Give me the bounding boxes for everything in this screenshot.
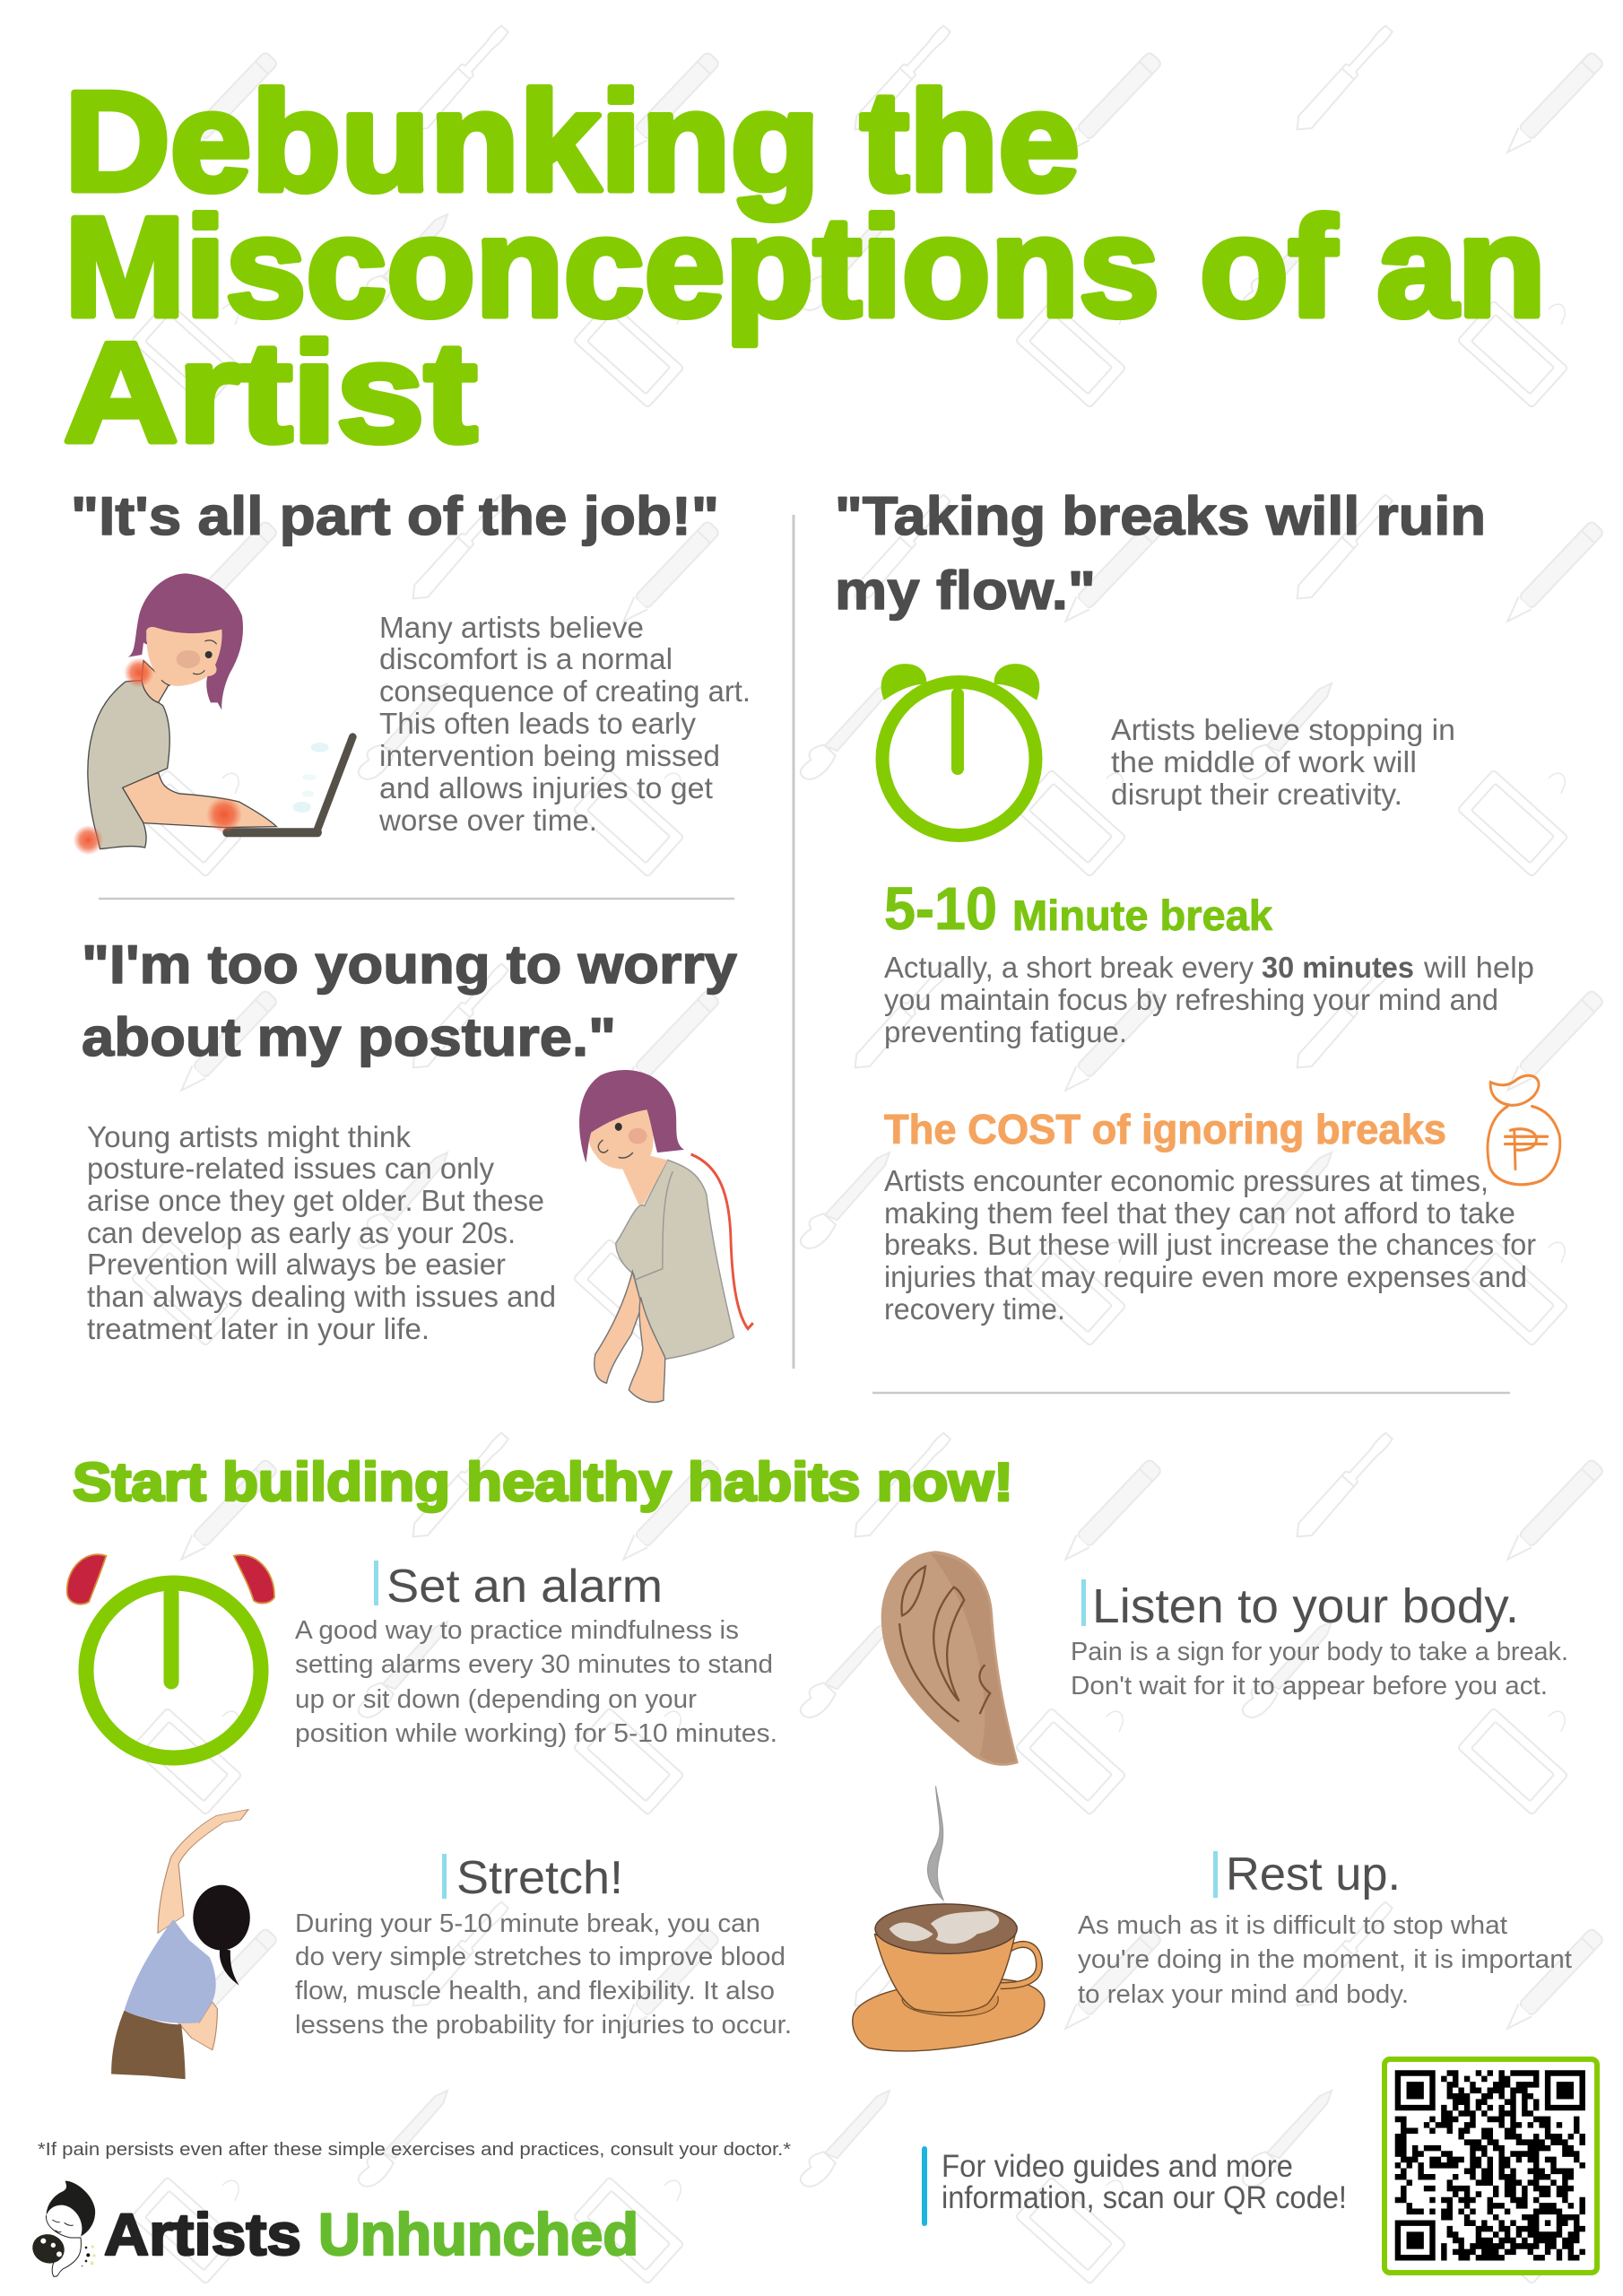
text block: you maintain focus by refreshing your mind and <box>884 983 1498 1016</box>
heading: taking breaks <box>835 486 1486 621</box>
text block: A good way to practice mindfulness is <box>295 1616 739 1645</box>
text block: up or sit down (depending on your <box>295 1685 697 1714</box>
text block: consequence of creating art. <box>379 674 751 708</box>
text block: Don't wait for it to appear before you act. <box>1071 1672 1548 1700</box>
text block: preventing fatigue. <box>884 1015 1127 1048</box>
text block: Prevention will always be easier <box>87 1248 506 1281</box>
text block <box>87 1120 556 1345</box>
text block <box>1071 1638 1568 1700</box>
footnote: *If pain persists even after these simple exercises and practices, consult your doctor.* <box>38 2140 791 2160</box>
heading: set an alarm: Set an alarm <box>386 1561 663 1613</box>
text block: Artists believe stopping in <box>1111 713 1455 746</box>
subheading: 5-10 minute break <box>884 875 1273 943</box>
text block: recovery time. <box>884 1292 1065 1326</box>
icon: alarm clock with red bells <box>67 1554 274 1758</box>
logo: artists unhunched <box>29 2181 638 2276</box>
text block: Artists encounter economic pressures at times, <box>884 1164 1488 1197</box>
panel: set an alarm <box>67 1554 777 1758</box>
panel: rest up <box>853 1787 1572 2051</box>
panel: taking breaks will ruin my flow <box>835 486 1560 1326</box>
text block: setting alarms every 30 minutes to stand <box>295 1650 773 1679</box>
text block: Many artists believe <box>379 611 644 644</box>
text block: and allows injuries to get <box>379 771 713 804</box>
text block: discomfort is a normal <box>379 642 673 675</box>
text block: breaks. But these will just increase the chances for <box>884 1228 1536 1261</box>
text block <box>884 1164 1536 1326</box>
heading: start building healthy habits now: Start building healthy habits now! <box>73 1452 1013 1512</box>
panel: stretch <box>111 1809 792 2079</box>
text block: intervention being missed <box>379 739 720 772</box>
text block: Actually, a short break every <box>884 951 1254 984</box>
text block <box>884 951 1534 1048</box>
heading: too young: "I'm too young to worry <box>82 935 738 995</box>
text block <box>378 611 751 837</box>
panel: it's all part of the job <box>71 486 751 855</box>
text block: the middle of work will <box>1111 745 1417 778</box>
text block: treatment later in your life. <box>87 1312 430 1345</box>
text block: 30 minutes <box>1262 951 1414 984</box>
heading: taking breaks: my flow." <box>835 561 1096 621</box>
illustration: artist hunched over laptop <box>74 573 352 855</box>
text block: will help <box>1423 951 1534 984</box>
heading: listen to your body: Listen to your body. <box>1092 1579 1519 1633</box>
illustration: slouching woman with curved spine <box>579 1070 753 1402</box>
text block: you're doing in the moment, it is important <box>1078 1945 1572 1974</box>
title <box>64 63 1546 472</box>
icon: green alarm clock <box>881 664 1039 836</box>
subheading: 5-10 minute break: 5-10 <box>884 875 997 943</box>
panel: listen to your body <box>881 1551 1568 1766</box>
icon: coffee cup with steam <box>853 1787 1045 2051</box>
icon: money bag <box>1488 1075 1560 1185</box>
title: Misconceptions of an <box>65 188 1546 346</box>
text block: position while working) for 5-10 minutes. <box>295 1719 777 1748</box>
text block: Pain is a sign for your body to take a break. <box>1071 1638 1568 1666</box>
text block: disrupt their creativity. <box>1111 778 1402 811</box>
icon: logo character with palette <box>29 2181 96 2276</box>
text block: making them feel that they can not afford to take <box>884 1196 1515 1230</box>
wordmark: Artists <box>104 2201 301 2267</box>
text block: than always dealing with issues and <box>87 1280 556 1313</box>
text block: arise once they get older. But these <box>87 1184 544 1217</box>
text block <box>295 1616 777 1748</box>
callout: scan qr code: information, scan our QR code! <box>942 2180 1347 2215</box>
text block: to relax your mind and body. <box>1078 1980 1409 2009</box>
text block: worse over time. <box>378 804 597 837</box>
text block: During your 5-10 minute break, you can <box>295 1909 760 1938</box>
text block: flow, muscle health, and flexibility. It also <box>295 1977 775 2005</box>
text block: do very simple stretches to improve blood <box>295 1943 785 1971</box>
icon: ear <box>881 1551 1019 1766</box>
subheading: 5-10 minute break: Minute break <box>1012 891 1273 939</box>
text block: injuries that may require even more expenses and <box>884 1260 1527 1293</box>
wordmark: Unhunched <box>318 2201 638 2267</box>
heading: all part of the job: "It's all part of the job!" <box>71 486 719 546</box>
text block <box>295 1909 792 2039</box>
text block: lessens the probability for injuries to occur. <box>295 2011 792 2039</box>
text block: can develop as early as your 20s. <box>87 1216 516 1249</box>
wordmark <box>104 2201 638 2267</box>
text block: This often leads to early <box>379 707 696 740</box>
panel: too young to worry <box>82 935 753 1402</box>
heading: rest up: Rest up. <box>1226 1848 1401 1900</box>
text block <box>1078 1911 1572 2009</box>
qr code <box>1384 2059 1597 2273</box>
callout: scan qr code <box>922 2146 1347 2226</box>
callout: scan qr code: For video guides and more <box>942 2149 1293 2184</box>
heading: too young: about my posture." <box>82 1007 616 1067</box>
text block: As much as it is difficult to stop what <box>1078 1911 1507 1940</box>
text block: posture-related issues can only <box>87 1152 494 1185</box>
subheading: the cost of ignoring breaks: The COST of ignoring breaks <box>884 1106 1446 1152</box>
heading: too young <box>82 935 738 1067</box>
text block <box>1111 713 1455 811</box>
text block: Young artists might think <box>87 1120 412 1153</box>
title: Debunking the <box>65 63 1080 221</box>
heading: stretch: Stretch! <box>456 1852 623 1904</box>
heading: taking breaks: "Taking breaks will ruin <box>835 486 1486 546</box>
illustration: woman stretching <box>111 1809 250 2079</box>
title: Artist <box>64 314 477 472</box>
